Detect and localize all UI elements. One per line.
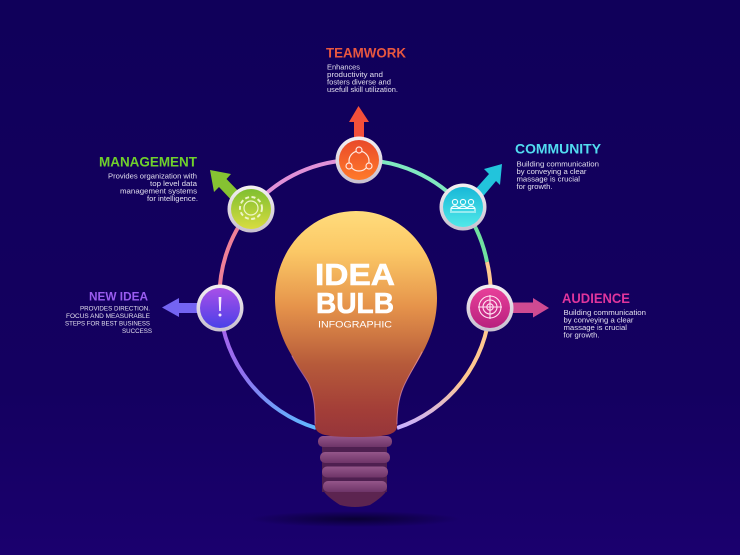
label: teamwork [326, 44, 406, 94]
arrow: community [472, 164, 502, 200]
text: teamwork description [327, 62, 398, 94]
label: community [515, 140, 602, 191]
node: audience [466, 284, 514, 332]
arrow: audience [510, 298, 549, 318]
bulb title: BULB [316, 288, 394, 320]
text: audience description [564, 308, 646, 340]
text: audience description: by conveying a clear [564, 316, 634, 324]
node: management [228, 186, 274, 232]
arrow: new idea [162, 298, 200, 317]
node: new idea [196, 284, 244, 332]
ground shadow [250, 511, 460, 527]
text: new idea description [65, 306, 153, 335]
bulb title: INFOGRAPHIC [318, 320, 392, 330]
icon: target [478, 295, 502, 319]
node: teamwork [336, 136, 382, 184]
text: audience description: for growth. [564, 330, 600, 340]
heading: teamwork: TEAMWORK [326, 44, 406, 60]
label: management [99, 154, 198, 203]
arrow: teamwork [349, 106, 369, 142]
text: management description: for intelligence. [147, 194, 198, 203]
label: audience [562, 290, 646, 340]
icon: people [450, 199, 476, 212]
bulb glass [275, 211, 437, 437]
text: teamwork description: Enhances [327, 62, 360, 72]
text: community description: by conveying a clear [516, 167, 587, 176]
bulb title: IDEA [315, 257, 395, 292]
text: new idea description: PROVIDES DIRECTION. [80, 306, 150, 312]
text: community description [516, 160, 599, 191]
text: management description: Provides organization with [108, 172, 197, 180]
text: teamwork description: productivity and [327, 70, 383, 79]
node: community [440, 184, 486, 230]
text: management description: management systems [120, 186, 197, 196]
heading: new idea: NEW IDEA [89, 290, 148, 304]
text: management description [108, 172, 198, 203]
text: audience description: Building communication [564, 308, 646, 317]
heading: community: COMMUNITY [515, 140, 602, 156]
icon: gear [240, 197, 262, 219]
label: new idea [65, 290, 153, 335]
bulb title [315, 257, 395, 330]
text: community description: massage is crucial [516, 174, 580, 184]
arrow: management [210, 170, 244, 205]
heading: management: MANAGEMENT [99, 154, 197, 170]
text: new idea description: STEPS FOR BEST BUSINESS [65, 320, 151, 328]
light bulb [275, 211, 437, 507]
text: management description: top level data [150, 179, 198, 188]
text: new idea description: SUCCESS [122, 328, 153, 335]
heading: audience: AUDIENCE [562, 290, 630, 306]
bulb rim highlights [292, 352, 422, 424]
bulb screw base [318, 436, 392, 507]
text: teamwork description: usefull skill utilization. [327, 85, 398, 94]
text: community description: for growth. [516, 182, 552, 191]
icon: exclamation [218, 297, 222, 316]
text: teamwork description: fosters diverse and [327, 78, 391, 86]
text: audience description: massage is crucial [564, 323, 627, 332]
text: community description: Building communication [516, 160, 599, 168]
icon: team circle [346, 147, 372, 171]
text: new idea description: FOCUS AND MEASURABLE [66, 313, 151, 320]
ring [220, 160, 491, 428]
